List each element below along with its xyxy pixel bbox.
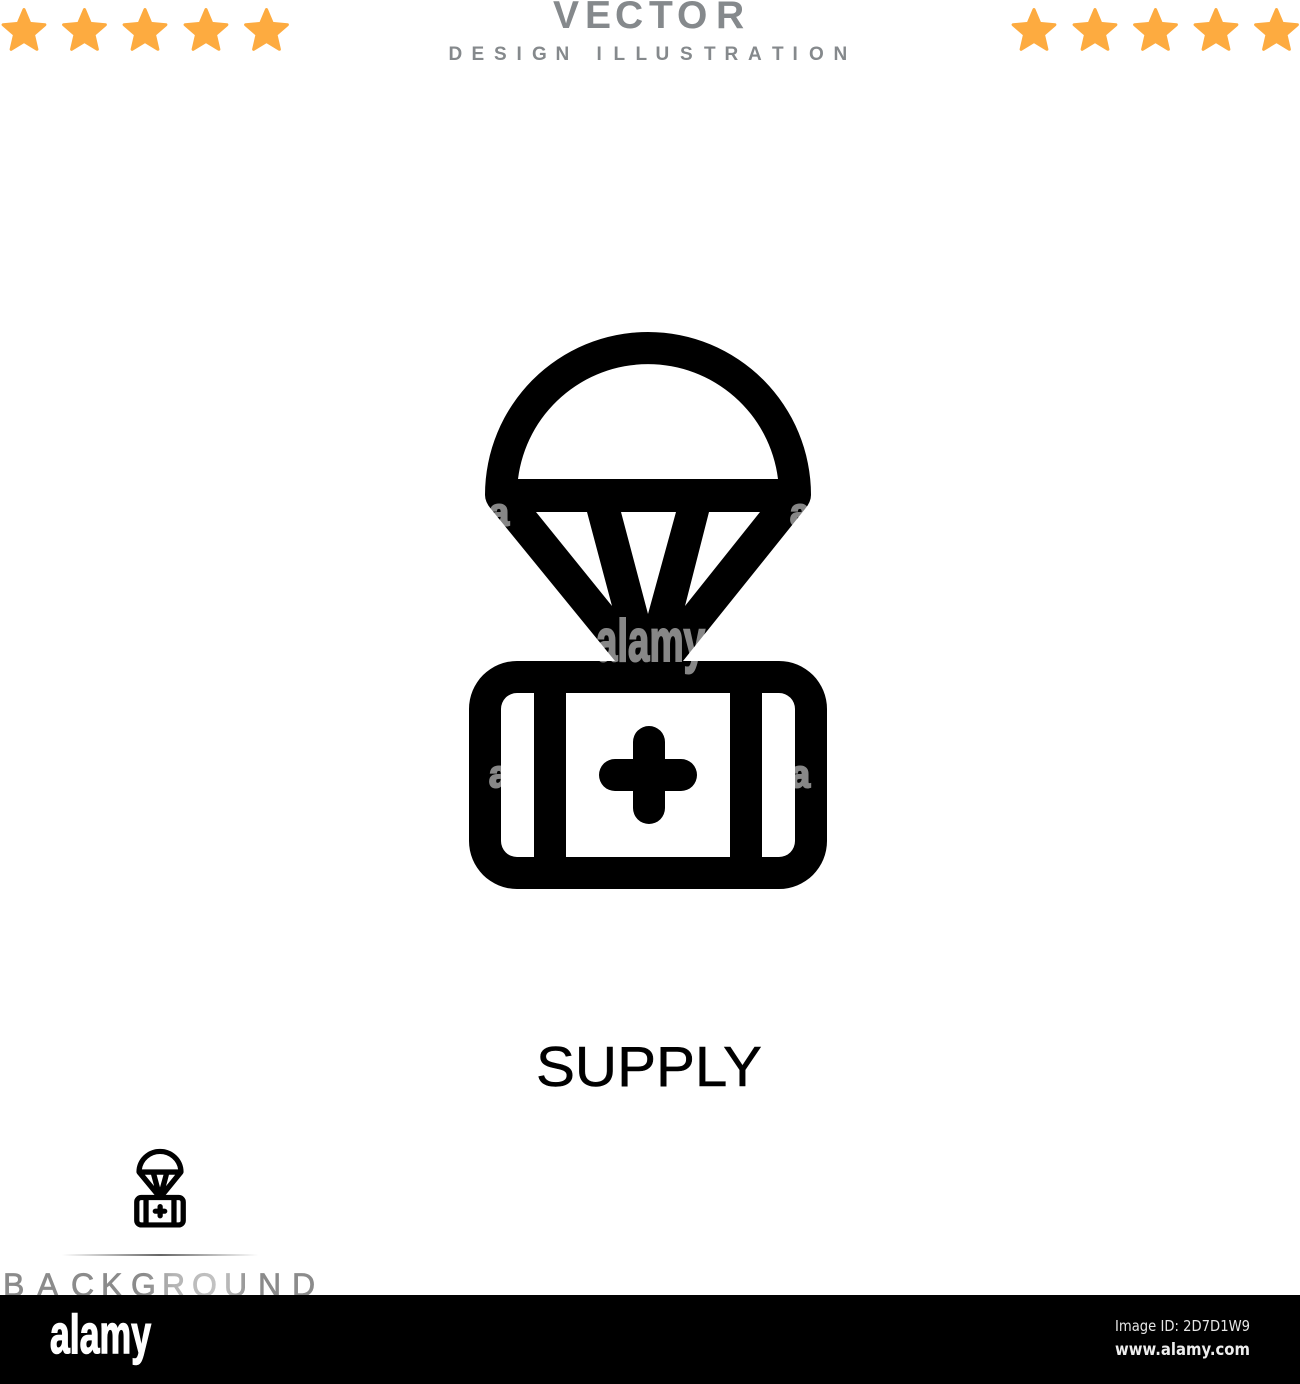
watermark fragment: a: [489, 754, 510, 796]
subheading: design illustration: DESIGN ILLUSTRATION: [448, 44, 847, 65]
main icon: parachute supply drop: [469, 332, 827, 889]
background label: BACKGROUND: [3, 1267, 315, 1303]
star 2: [1074, 10, 1116, 49]
right star rating: [1013, 10, 1297, 49]
star 3: [1135, 10, 1176, 49]
left star rating: [3, 10, 287, 49]
medical crate: [469, 661, 827, 889]
star 5: [246, 10, 287, 49]
star 5: [1256, 10, 1297, 49]
watermark overlay: [489, 492, 811, 796]
website: www.alamy.com: [1115, 1340, 1250, 1360]
watermark fragment: a: [489, 492, 510, 534]
watermark fragment: a: [790, 492, 811, 534]
footer logo: alamy: [50, 1303, 151, 1365]
star 1: [3, 10, 45, 49]
image id: Image ID: 2D7D1W9: [1115, 1317, 1250, 1335]
star 3: [124, 10, 166, 49]
star 2: [64, 10, 105, 49]
header title: [448, 0, 847, 65]
icon label: SUPPLY: SUPPLY: [536, 1035, 762, 1099]
medical cross: [599, 726, 697, 824]
small icon: parachute supply drop: [134, 1149, 186, 1227]
star 4: [1195, 10, 1237, 49]
center watermark: alamy: [596, 608, 705, 674]
star 1: [1013, 10, 1055, 49]
watermark fragment: a: [790, 754, 811, 796]
parachute canopy and strings: [485, 332, 811, 661]
star 4: [185, 10, 227, 49]
footer bar: [0, 1295, 1300, 1384]
